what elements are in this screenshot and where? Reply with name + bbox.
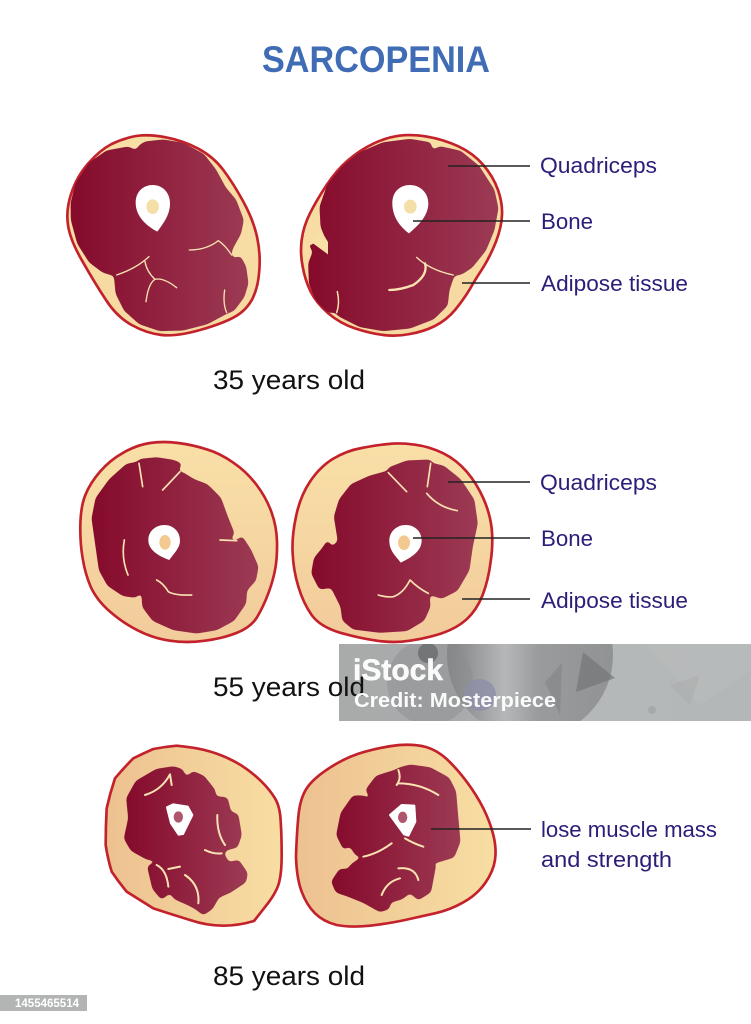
leader line: bone <box>413 537 530 539</box>
label: Quadriceps: Quadriceps <box>540 153 657 178</box>
label: Bone: Bone <box>541 526 593 551</box>
panel: 35 years old thigh cross-sections <box>67 135 502 336</box>
right thigh, 35 years <box>301 135 502 336</box>
watermark background <box>339 644 751 721</box>
label: lose muscle mass and strength <box>541 817 717 872</box>
stock image id strip <box>0 995 87 1011</box>
label: lose muscle mass and strength: lose muscle mass <box>541 817 717 842</box>
age caption: 55 years old: 55 years old <box>213 672 365 702</box>
title: SARCOPENIA <box>262 39 490 80</box>
left thigh, 85 years <box>106 746 282 926</box>
leader line: quadriceps <box>448 165 530 167</box>
label: Bone: Bone <box>541 209 593 234</box>
label: Adipose tissue: Adipose tissue <box>541 271 688 296</box>
age caption: 85 years old: 85 years old <box>213 961 365 991</box>
label: Adipose tissue: Adipose tissue <box>541 588 688 613</box>
stock image id strip: 1455465514 <box>15 998 80 1010</box>
left thigh, 55 years <box>80 442 277 642</box>
leader line: quadriceps <box>448 481 530 483</box>
panel: 85 years old thigh cross-sections <box>106 745 496 927</box>
leader line: adipose tissue <box>462 282 530 284</box>
panel: 55 years old thigh cross-sections <box>80 442 492 642</box>
watermark logo: iStock: iStock <box>353 654 443 687</box>
right thigh, 85 years <box>296 745 496 927</box>
label: lose muscle mass and strength: and strength <box>541 847 672 872</box>
age caption: 35 years old: 35 years old <box>213 365 365 395</box>
left thigh, 35 years <box>67 135 260 335</box>
leader line: bone <box>413 220 530 222</box>
right thigh, 55 years <box>292 443 492 642</box>
label: Quadriceps: Quadriceps <box>540 470 657 495</box>
watermark credit: Credit: Mosterpiece <box>354 690 556 712</box>
leader line: adipose tissue <box>462 598 530 600</box>
leader line: muscle mass <box>431 828 531 830</box>
